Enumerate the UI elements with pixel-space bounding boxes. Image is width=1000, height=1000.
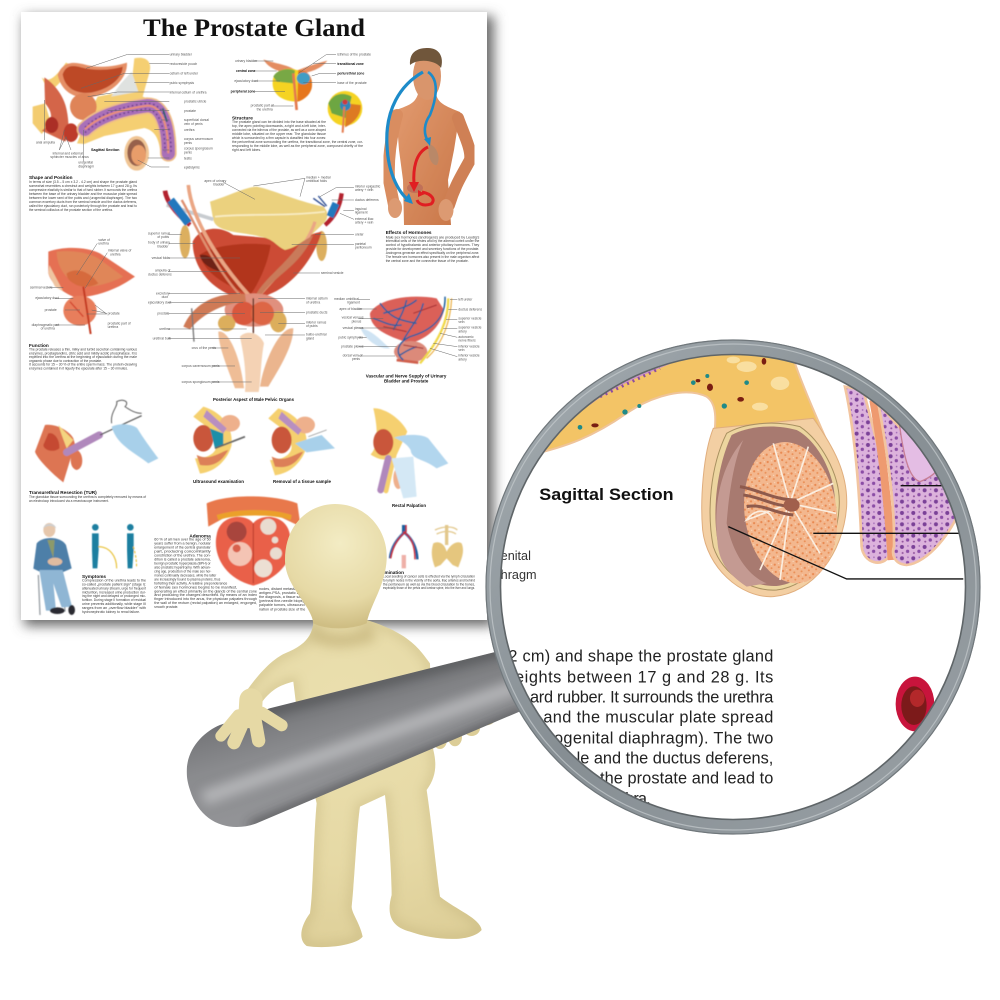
labels: posterior aspect: inguinal	[355, 207, 367, 211]
labels: sagittal section: epididymis	[184, 165, 200, 169]
magnified label fragments: enital	[501, 549, 531, 563]
labels: prostate zones: isthmus of the prostate	[337, 53, 371, 57]
labels: posterior aspect: seminal vesicle	[321, 271, 344, 275]
labels: vascular supply	[334, 297, 482, 361]
text: transurethral resection: an electroloop introduced via a resectoscope instrument.	[29, 499, 109, 503]
magnified paragraph: eights between 17 g and 28 g. Its	[515, 668, 773, 686]
text: carcinoma, partly hidden by figure: antigen-PSA, prostatic acid	[259, 591, 303, 595]
labels: sagittal section: vein of penis	[184, 122, 203, 126]
labels: posterior aspect: inferior epigastric	[355, 184, 381, 188]
labels: posterior aspect: prostate	[157, 311, 170, 315]
labels: posterior aspect: urethra	[159, 327, 170, 331]
illustration: rectal palpation	[371, 408, 448, 498]
magnified leader lines	[728, 486, 963, 579]
text: adenoma: also prostatic hypertrophy. With advan-	[154, 566, 211, 570]
labels: posterior aspect: corpus spongiosum penis	[182, 380, 220, 384]
text: shape and position	[29, 175, 138, 212]
labels: posterior aspect: internal ostium	[306, 297, 328, 301]
text: adenoma: finger introduced into the anus, the physician palpates through	[154, 597, 257, 601]
illustration: male torso with hormone arrows	[388, 48, 470, 225]
magnifier handle	[186, 652, 519, 827]
magnified paragraph: and the muscular plate spread	[543, 709, 773, 727]
text: symptoms: ranges from an „overflow bladder" with	[82, 606, 146, 610]
text: symptoms	[82, 574, 147, 614]
text: carcinoma, partly hidden by figure: (perineal fine-needle biopsy)	[259, 599, 306, 603]
labels: vascular supply: median umbilical	[334, 297, 359, 301]
labels: vascular supply: vesical plexus	[343, 326, 364, 330]
labels: vascular supply: autonomic	[458, 335, 474, 339]
text: structure: the periurethral zone surrounding the urethra, the transitional zone, the central zone, cor-	[232, 140, 364, 144]
labels: sagittal section: testis	[184, 156, 192, 160]
labels: posterior aspect: duct	[162, 295, 168, 299]
text: function: enzymes, prostaglandins, citric acid and mildly acidic phosphatase. It is	[29, 351, 137, 355]
text: shape and position: common excretory ducts from the seminal vesicle and the ductus deferens,	[29, 200, 137, 204]
labels: vascular supply: artery	[458, 329, 467, 333]
text: structure: which is surrounded by a firm capsule is classified into four zones:	[232, 136, 326, 140]
labels: bladder cross-section: prostatic part of	[108, 321, 131, 325]
labels: sagittal section: corpus spongiosum	[184, 147, 213, 151]
poster	[21, 12, 487, 620]
text: adenoma: part, producing concomitantly	[154, 550, 211, 554]
text: function: The prostate releases a thin, milky and turbid secretion containing various	[29, 348, 137, 352]
text: dissemination: to lymph nodes in the vicinity of the aorta, iliac arteries and behind	[383, 578, 475, 582]
labels: posterior aspect: ductus deferens	[355, 198, 379, 202]
text: function: orgasmic phase due to contraction of the prostate.	[29, 359, 102, 363]
labels: posterior aspect: parietal	[355, 242, 366, 246]
labels: prostate zones: the urethra	[257, 107, 273, 111]
labels: posterior aspect: ureter	[355, 233, 365, 237]
labels: prostate zones: prostatic part of	[251, 104, 274, 108]
labels: posterior aspect: ductus deferens	[148, 272, 172, 276]
text: function: It accounts for 15 – 30 % of the entire sperm mass. The protein-cleaving	[29, 363, 137, 367]
labels: vascular supply: inferior vesicle	[458, 354, 480, 358]
poster title: The Prostate Gland	[143, 15, 365, 42]
illustration: removal of a tissue sample	[268, 408, 335, 475]
magnified paragraph: the prostate and lead to	[600, 769, 773, 787]
labels: vascular supply: apex of bladder	[339, 307, 363, 311]
magnified paragraph: ard rubber. It surrounds the urethra	[530, 688, 774, 706]
labels: vascular supply: inferior vesicle	[458, 344, 480, 348]
text: effects of hormones	[386, 230, 479, 263]
labels: sagittal section: anal ampulla	[36, 141, 55, 145]
caption: posterior aspect: Posterior Aspect of Male Pelvic Organs	[213, 397, 294, 402]
text: structure: responding to the middle lobe, as well as the peripheral zone, composed chiefly of the	[232, 144, 363, 148]
labels: prostate zones: peripheral zone	[231, 89, 255, 93]
text: symptoms: urine prevents additionally, while stage III	[82, 602, 146, 606]
labels: posterior aspect: bulbo-urethral	[306, 333, 327, 337]
text: adenoma: generating an effect primarily on the glands of the central zone	[154, 589, 257, 593]
magnified caption: Sagittal Section	[539, 485, 674, 504]
text: carcinoma, partly hidden by figure	[259, 587, 308, 612]
poster drop shadow	[24, 16, 494, 626]
figure right hand behind handle	[433, 711, 495, 749]
illustration: vascular and nerve supply	[361, 297, 452, 363]
text: effects of hormones: Effects of Hormones	[386, 230, 432, 235]
magnified paragraph: 2 cm) and shape the prostate gland	[508, 648, 773, 666]
labels: vascular supply: pubic symphysis	[338, 335, 363, 339]
illustration: pelvis skeleton	[432, 525, 463, 567]
text: dissemination: especially those of the pelvis and lumbar spine, into the liver and lungs.	[383, 586, 475, 590]
labels: sagittal section: pubic symphysis	[170, 81, 194, 85]
labels: posterior aspect: external iliac	[355, 217, 374, 221]
text: structure: top, the apex pointing downwards, a right and a left lobe, inter-	[232, 124, 327, 128]
illustration: ultrasound examination	[193, 407, 245, 474]
3D figure	[186, 504, 519, 948]
text: symptoms: attenuated urinary stream, urge for frequent	[82, 586, 146, 590]
labels: posterior aspect: ampulla of	[155, 269, 170, 273]
text: adenoma: Adenoma	[189, 533, 211, 538]
text: dissemination	[372, 570, 475, 590]
text: adenoma: are increasingly bound to plasma proteins, thus	[154, 577, 220, 581]
labels: prostate zones: urinary bladder	[235, 59, 258, 63]
text: shape and position: In terms of size (3.5 – 5 cm x 3.2 - 4.2 cm) and shape the prostate gland	[29, 180, 137, 184]
caption: rectal palpation: Rectal Palpation	[392, 503, 426, 508]
labels: bladder cross-section: urethra	[110, 252, 121, 256]
labels: bladder cross-section: diaphragmatic part	[32, 323, 59, 327]
magnified testis lobes	[744, 442, 838, 584]
labels: sagittal section: diaphragm	[78, 164, 94, 168]
text: adenoma	[154, 533, 257, 609]
labels: vascular supply: prostate plexus	[341, 345, 364, 349]
text: adenoma: constriction of the urethra. The con-	[154, 554, 211, 558]
text: dissemination: Local seeding of cancer cells is effected via the lymph circulation	[383, 574, 475, 578]
labels: vascular supply: left ureter	[458, 297, 473, 301]
magnified corpus shapes	[845, 387, 889, 563]
labels: vascular supply: plexus	[352, 319, 362, 323]
illustration: transurethral resection	[35, 400, 158, 482]
caption: ultrasound examination: Ultrasound examination	[193, 479, 244, 484]
illustration: prostate zones	[263, 59, 362, 133]
labels: posterior aspect: urethral bulb	[153, 337, 171, 341]
text: effects of hormones: Androgens generate an effect specifically on the peripheral zone.	[386, 251, 479, 255]
illustration: posterior aspect of male pelvic organs	[165, 185, 342, 392]
text: effects of hormones: interstitial cells of the testes and by the adrenal cortex under the	[386, 239, 479, 243]
text: function: expelled into the urethra at the beginning of ejaculation during the male	[29, 355, 137, 359]
labels: prostate zones: base of the prostate	[337, 81, 367, 85]
icon: urination with strong stream	[92, 524, 117, 568]
caption: vascular supply	[366, 374, 447, 384]
text: shape and position: between the base of the urinary bladder and the muscular plate spread	[29, 192, 137, 196]
labels: posterior aspect: median + medial	[306, 175, 331, 179]
magnified fat tissue band	[544, 355, 826, 453]
labels: posterior aspect: of pubis	[306, 324, 318, 328]
text: adenoma: mones continually decreases, while the latter	[154, 573, 217, 577]
text: adenoma: dition is called a prostate adenoma,	[154, 558, 211, 562]
text: adenoma: years suffer from a benign, nodular	[154, 542, 211, 546]
text: symptoms: Compression of the urethra leads to the	[82, 578, 146, 582]
text: transurethral resection: Transurethral Resection (TUR)	[29, 490, 97, 495]
text: symptoms: turition. During stage II formation of residual	[82, 598, 146, 602]
magnified scrotal sac	[702, 418, 847, 597]
magnified paragraph	[508, 648, 774, 808]
labels: bladder cross-section: seminal vesicle	[30, 285, 53, 289]
magnified red vessel	[896, 677, 934, 731]
text: carcinoma, partly hidden by figure: nation of prostate size of the	[259, 608, 305, 612]
illustration: seated patient	[33, 523, 75, 615]
labels: bladder cross-section: valve of	[98, 238, 110, 242]
labels: sagittal section: penis	[184, 141, 192, 145]
text: structure: connected via the isthmus of the prostate, as well as a cone-shaped	[232, 128, 326, 132]
text: adenoma: and producing the changes described. By means of an index	[154, 593, 257, 597]
text: structure: Structure	[232, 116, 253, 120]
text: structure: right and left lobes.	[232, 148, 261, 152]
text: structure: middle lobe, situated on the upper rear. The glandular tissue	[232, 132, 326, 136]
labels: vascular supply: vein	[458, 348, 465, 352]
text: transurethral resection: The glandular tissue surrounding the urethra is completely removed by means of	[29, 495, 147, 499]
labels: posterior aspect: excretory	[156, 291, 170, 295]
text: carcinoma, partly hidden by figure: palpable tumors, ultrasound	[259, 603, 305, 607]
text: adenoma: smooth prostate.	[154, 605, 178, 609]
text: function	[29, 343, 137, 370]
labels: sagittal section: urethra	[184, 128, 195, 132]
magnified paragraph: rogenital diaphragm). The two	[548, 729, 773, 747]
labels: posterior aspect: umbilical folds	[306, 179, 327, 183]
labels: posterior aspect: ligament	[355, 211, 368, 215]
text: adenoma: of female sex hormones begins to be manifest,	[154, 585, 237, 589]
labels: posterior aspect: ejaculatory duct	[148, 301, 171, 305]
labels: vascular supply: superior vesicle	[458, 316, 482, 320]
figure head	[285, 504, 387, 628]
text: dissemination: the peritoneum as well as via the blood circulation to the bones,	[383, 582, 475, 586]
text: effects of hormones: provide for development and secretory functions of the prostate.	[386, 247, 479, 251]
labels: bladder cross-section: internal valve of	[108, 249, 131, 253]
text: effects of hormones: The female sex hormones also present in the male organism affect	[386, 255, 479, 259]
illustration: adenoma cross-section	[207, 496, 301, 586]
labels: vascular supply: nerve fibers	[458, 339, 476, 343]
labels: bladder cross-section: prostate	[45, 308, 57, 312]
text: adenoma: the wall of the rectum (rectal palpation) an enlarged, engorged,	[154, 601, 257, 605]
labels: bladder cross-section: prostate	[108, 311, 120, 315]
text: effects of hormones: control of hypothalamic and anterior pituitary hormones. They	[386, 243, 479, 247]
labels: bladder cross-section: ejaculatory duct	[35, 296, 59, 300]
text: effects of hormones: the central zone and the connective tissue of the prostate.	[386, 259, 469, 263]
labels: bladder cross-section	[30, 238, 131, 331]
labels: vascular supply: dorsal vein of	[343, 353, 363, 357]
labels: sagittal section: internal and external	[53, 151, 83, 155]
labels: vascular supply: ductus deferens	[458, 307, 482, 311]
text: adenoma: 60 % of all men over the age of 50	[154, 538, 211, 542]
text: shape and position: between the lower rami of the pubis and (urogenital diaphragm). The two	[29, 196, 137, 200]
labels: vascular supply: penis	[352, 357, 360, 361]
labels: posterior aspect	[148, 175, 381, 384]
magnified paragraph: le and the ductus deferens,	[577, 749, 773, 767]
text: shape and position: called the ejaculatory duct, run posteriorly through the prostate and lead to	[29, 204, 137, 208]
labels: posterior aspect: artery + vein	[355, 188, 374, 192]
labels: posterior aspect: crus of the penis	[192, 346, 216, 350]
labels: sagittal section: sphincter muscles of anus	[50, 155, 89, 159]
caption: vascular supply: Vascular and Nerve Supply of Urinary	[366, 374, 447, 378]
caption: sagittal section: Sagittal Section	[91, 148, 120, 152]
text: carcinoma, partly hidden by figure: nodes, distant metastases	[259, 587, 302, 591]
figure body edge shading	[242, 618, 482, 947]
labels: sagittal section: ostium of left ureter	[170, 72, 199, 76]
text: structure: The prostate gland can be divided into the base situated at the	[232, 120, 326, 124]
lens contents: magnified poster detail	[501, 340, 963, 808]
labels: posterior aspect: of pubis	[157, 235, 169, 239]
text: shape and position: Shape and Position	[29, 175, 73, 180]
labels: bladder cross-section: urethra	[108, 325, 118, 329]
illustration: pelvic blood vessels	[390, 525, 417, 568]
text: shape and position: compressive elasticity is similar to that of hard rubber. It surrounds the urethra	[29, 188, 138, 192]
text: dissemination: Dissemination	[372, 570, 404, 575]
labels: sagittal section: corpus cavernosum	[184, 137, 213, 141]
labels: posterior aspect: bladder	[213, 183, 225, 187]
labels: posterior aspect: vesical folds	[152, 256, 170, 260]
illustration: bladder and prostate cross-section	[48, 248, 135, 334]
icon: urination with weak stream	[127, 524, 137, 568]
text: symptoms: so-called „prostate patient sign" (stage I):	[82, 582, 146, 586]
labels: vascular supply: superior vesicle	[458, 326, 482, 330]
text: symptoms: hydronephrotic kidney to renal failure.	[82, 610, 140, 614]
labels: bladder cross-section: of urethra	[41, 327, 55, 331]
labels: posterior aspect: inferior ramus	[306, 320, 327, 324]
labels: vascular supply: vesical venous	[342, 316, 364, 320]
text: function: Function	[29, 343, 49, 348]
labels: sagittal section: penis	[184, 151, 192, 155]
labels: vascular supply: artery	[458, 357, 467, 361]
labels: prostate zones	[231, 53, 371, 111]
magnified paragraph: ethra.	[613, 790, 651, 808]
labels: prostate zones: ejaculatory duct	[234, 79, 258, 83]
lens ring	[486, 340, 980, 834]
figure body and legs	[242, 618, 482, 947]
labels: posterior aspect: body of urinary	[148, 241, 170, 245]
arrows: hormone pathways	[387, 72, 436, 205]
labels: posterior aspect: bladder	[157, 244, 169, 248]
illustration: sagittal section	[33, 58, 173, 171]
labels: sagittal section: prostatic utricle	[184, 100, 207, 104]
text: adenoma: benign prostatic hyperplasia (BPH) or	[154, 562, 211, 566]
figure left hand on handle	[221, 700, 282, 743]
text: adenoma: forfeiting their activity. A relative preponderance	[154, 581, 227, 585]
text: symptoms: ing the night and delayed or prolonged mic-	[82, 594, 147, 598]
text: adenoma: cing age, production of the male sex hor-	[154, 569, 212, 573]
text: adenoma: enlargement of the central glandular	[154, 546, 211, 550]
magnified label fragments: hragm	[501, 568, 537, 582]
text: symptoms: Symptoms	[82, 574, 106, 579]
labels: bladder cross-section: urethra	[98, 242, 109, 246]
text: shape and position: the seminal colliculus of the prostate section of the urethra.	[29, 208, 113, 212]
text: shape and position: somewhat resembles a chestnut and weights between 17 g and 28 g. Its	[29, 184, 137, 188]
text: structure	[232, 116, 364, 152]
text: function: enzymes contained in it liquefy the ejaculate after 15 – 30 minutes.	[29, 366, 128, 370]
labels: posterior aspect: apex of urinary	[204, 179, 227, 183]
labels: sagittal section: urogenital	[78, 161, 93, 165]
labels: sagittal section: prostate	[184, 109, 196, 113]
labels: prostate zones: periurethral zone	[337, 72, 364, 76]
labels: posterior aspect: peritoneum	[355, 246, 372, 250]
labels: posterior aspect: gland	[306, 336, 314, 340]
text: effects of hormones: Male sex hormones (androgens) are produced by Leydig's	[386, 235, 479, 239]
labels: prostate zones: central zone	[236, 69, 256, 73]
labels: posterior aspect: prostatic ducts	[306, 311, 328, 315]
labels: posterior aspect: of urethra	[306, 300, 320, 304]
labels: vascular supply: ligament	[347, 301, 360, 305]
text: symptoms: micturition, increased urine production dur-	[82, 590, 147, 594]
labels: posterior aspect: superior ramus	[148, 231, 171, 235]
magnifier lens	[486, 340, 980, 834]
labels: vascular supply: vein	[458, 320, 465, 324]
text: carcinoma, partly hidden by figure: the diagnosis, a tissue sample	[259, 595, 308, 599]
labels: sagittal section: urinary bladder	[170, 53, 193, 57]
labels: posterior aspect: artery + vein	[355, 221, 374, 225]
text: transurethral resection	[29, 490, 147, 503]
magnified label fragments	[501, 549, 537, 582]
labels: sagittal section	[36, 53, 213, 169]
caption: removal of a tissue sample: Removal of a tissue sample	[273, 479, 331, 484]
labels: sagittal section: superficial dorsal	[184, 118, 209, 122]
caption: vascular supply: Bladder and Prostate	[384, 378, 429, 384]
labels: sagittal section: internal ostium of urethra	[170, 90, 207, 94]
labels: sagittal section: rectovesicle pouch	[170, 62, 197, 66]
labels: prostate zones: transitional zone	[337, 62, 364, 66]
labels: posterior aspect: corpus cavernosum penis	[182, 364, 220, 368]
